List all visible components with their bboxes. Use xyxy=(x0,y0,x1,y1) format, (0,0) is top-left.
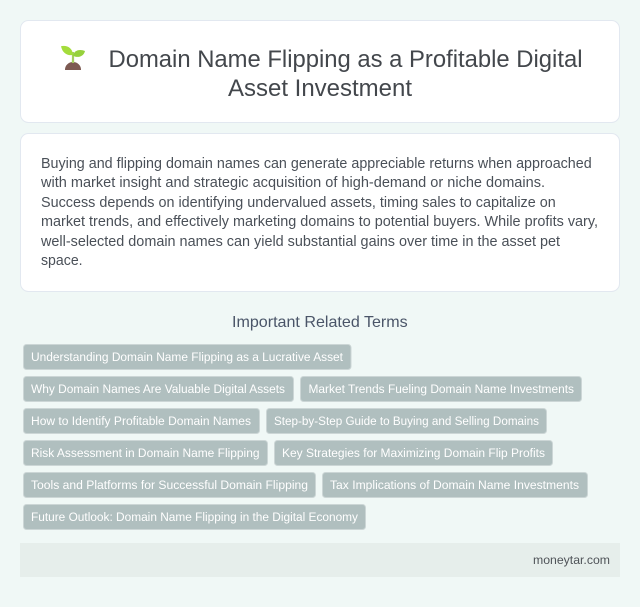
tag: identify profitable: How to Identify Profitable Domain Names xyxy=(31,414,251,428)
tag: why valuable: Why Domain Names Are Valuable Digital Assets xyxy=(31,382,285,396)
text block: description: Buying and flipping domain names can generate appreciable returns when approached xyxy=(41,155,592,172)
tag: understanding: Understanding Domain Name Flipping as a Lucrative Asset xyxy=(31,350,344,364)
tag: understanding xyxy=(24,344,351,370)
title: Domain Name Flipping as a Profitable Digital xyxy=(108,46,582,73)
footer: moneytar.com xyxy=(533,553,610,567)
tag: step-by-step: Step-by-Step Guide to Buying and Selling Domains xyxy=(274,414,539,428)
tag: market trends xyxy=(300,376,582,402)
heading: important related terms: Important Related Terms xyxy=(232,314,408,331)
tag: step-by-step xyxy=(266,408,546,434)
tag: future outlook xyxy=(24,504,366,530)
icon: seedling xyxy=(61,46,85,70)
text block: description xyxy=(40,155,598,269)
text block: description: well-selected domain names can yield substantial gains over time in the asset pet xyxy=(40,233,561,250)
tag: tax implications xyxy=(322,472,588,498)
tag: tax implications: Tax Implications of Domain Name Investments xyxy=(330,478,579,492)
tag: key strategies xyxy=(274,440,552,466)
text block: description: Success depends on identifying undervalued assets, timing sales to capitalize on xyxy=(41,194,556,211)
tag: market trends: Market Trends Fueling Domain Name Investments xyxy=(308,382,574,396)
tag: identify profitable xyxy=(24,408,260,434)
panel: title header xyxy=(20,20,620,122)
tag: tools and platforms: Tools and Platforms for Successful Domain Flipping xyxy=(31,478,308,492)
title xyxy=(108,46,582,102)
tag: tools and platforms xyxy=(24,472,316,498)
tag: future outlook: Future Outlook: Domain Name Flipping in the Digital Economy xyxy=(31,510,359,524)
text block: description: space. xyxy=(41,252,83,269)
footer xyxy=(20,543,620,577)
tag list xyxy=(24,344,588,530)
panel: description xyxy=(20,134,620,292)
tag: risk assessment xyxy=(24,440,268,466)
tag: why valuable xyxy=(24,376,294,402)
tag: key strategies: Key Strategies for Maximizing Domain Flip Profits xyxy=(282,446,545,460)
tag: risk assessment: Risk Assessment in Domain Name Flipping xyxy=(31,446,260,460)
text block: description: market trends, and effectively marketing domains to potential buyers. While profits vary, xyxy=(41,213,598,230)
text block: description: with market insight and strategic acquisition of high-demand or niche domains. xyxy=(40,174,545,191)
title: Asset Investment xyxy=(228,75,412,102)
